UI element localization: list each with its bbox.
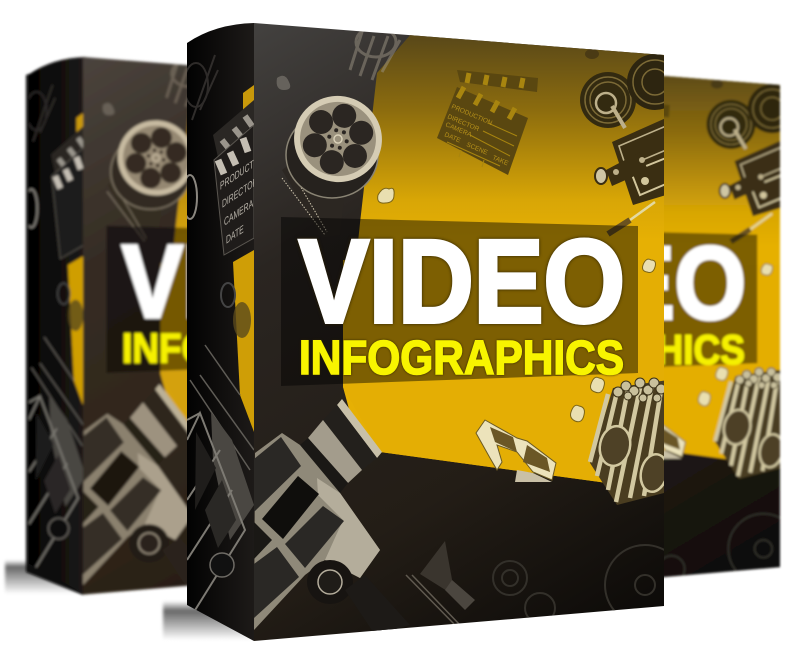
clapperboard labels: SCENE bbox=[465, 141, 489, 157]
left box subtitle: INFOGRAPHICS bbox=[122, 324, 405, 371]
title band bbox=[281, 217, 638, 386]
spine clapper labels bbox=[220, 150, 266, 247]
left box spine bbox=[25, 54, 87, 598]
left box front bbox=[83, 54, 458, 598]
clapperboard labels: TAKE bbox=[491, 154, 510, 168]
right box subtitle: INFOGRAPHICS bbox=[461, 326, 745, 373]
back box: left bbox=[25, 54, 458, 598]
clapperboard labels: DATE bbox=[443, 131, 462, 145]
clapperboard labels: DIRECTOR bbox=[446, 113, 480, 133]
title: VIDEO: VIDEO bbox=[299, 216, 625, 348]
clapperboard labels bbox=[443, 103, 510, 168]
spine clapper labels: DATE bbox=[226, 223, 244, 247]
clapperboard labels: CAMERA bbox=[444, 121, 473, 139]
shadow: main box bbox=[163, 601, 254, 641]
main box spine bbox=[183, 20, 266, 645]
right box title: VIDEO bbox=[461, 226, 746, 341]
spine clapper labels: DIRECTOR bbox=[222, 175, 257, 211]
shadow: left box bbox=[5, 560, 83, 597]
main box front cover bbox=[254, 20, 685, 645]
main box bbox=[183, 20, 685, 645]
subtitle: INFOGRAPHICS: INFOGRAPHICS bbox=[299, 332, 624, 385]
left box band bbox=[106, 226, 417, 373]
spine clapper labels: CAMERA bbox=[224, 197, 254, 229]
right box band bbox=[445, 227, 757, 375]
left box title: VIDEO bbox=[122, 224, 406, 339]
clapperboard labels: PRODUCTION bbox=[450, 103, 493, 127]
back box: right bbox=[421, 54, 798, 601]
spine clapper labels: PRODUCTION bbox=[220, 150, 266, 193]
